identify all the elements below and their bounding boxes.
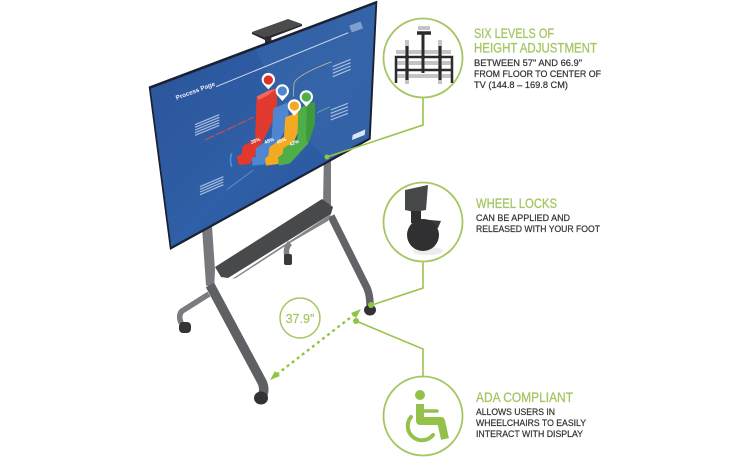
width callout: 37.9" xyxy=(286,312,314,326)
body: wheel: CAN BE APPLIED AND xyxy=(476,213,570,224)
top shelf xyxy=(252,19,302,46)
pin green xyxy=(300,90,313,107)
percent labels: 38% xyxy=(250,137,262,146)
connector dot: ADA xyxy=(353,318,359,324)
body: ADA: INTERACT WITH DISPLAY xyxy=(476,429,584,440)
dashed width arrow xyxy=(270,309,361,380)
red stair xyxy=(237,88,277,165)
body: ADA: WHEELCHAIRS TO EASILY xyxy=(476,418,587,429)
heading: wheel: WHEEL LOCKS xyxy=(476,196,557,211)
text block left upper xyxy=(195,115,219,135)
green stair xyxy=(278,102,315,166)
connector: height xyxy=(327,98,423,157)
percent labels: 42% xyxy=(289,139,301,148)
body: height: FROM FLOOR TO CENTER OF xyxy=(474,69,601,80)
mount frame xyxy=(396,33,452,83)
body: height: TV (144.8 – 169.8 CM) xyxy=(474,80,568,91)
icon: wheelchair xyxy=(408,390,445,440)
percent labels xyxy=(250,137,301,148)
body: wheel: RELEASED WITH YOUR FOOT xyxy=(476,224,600,235)
heading: height: SIX LEVELS OF xyxy=(474,26,554,41)
orange stair xyxy=(265,112,299,166)
tray xyxy=(215,199,333,279)
screen glare xyxy=(255,4,375,160)
connector dot: height xyxy=(324,154,330,160)
cart stand xyxy=(179,150,376,404)
connector: wheel xyxy=(372,262,423,305)
heading: height: HEIGHT ADJUSTMENT xyxy=(474,40,597,56)
back caster xyxy=(284,243,292,265)
pin orange xyxy=(288,99,301,116)
pin blue xyxy=(276,84,289,101)
connector: ADA xyxy=(356,321,423,376)
left post xyxy=(202,226,215,290)
text block right upper xyxy=(333,59,351,77)
width callout xyxy=(280,298,320,338)
ghost positions xyxy=(396,28,451,84)
right post xyxy=(323,150,331,205)
heading rule xyxy=(216,33,348,87)
circle: wheel lock xyxy=(384,182,462,262)
body: ADA: ALLOWS USERS IN xyxy=(476,407,555,418)
screen heading: Process Page xyxy=(175,81,217,102)
text block right lower xyxy=(331,103,348,120)
blue stair xyxy=(252,103,289,166)
percent labels: 45% xyxy=(276,137,288,146)
TV xyxy=(149,1,377,250)
logo xyxy=(352,129,365,140)
front left leg xyxy=(210,285,268,404)
body: height: BETWEEN 57" AND 66.9" xyxy=(474,58,582,69)
connector dot: wheel xyxy=(368,302,374,308)
percent labels: 48% xyxy=(264,137,276,146)
back left leg xyxy=(179,294,209,333)
circle: height adjustment mount xyxy=(384,18,462,98)
circle: ADA xyxy=(384,376,462,456)
right leg xyxy=(331,216,376,316)
screen xyxy=(151,4,375,247)
TV frame xyxy=(149,1,377,250)
text block left lower xyxy=(200,177,223,195)
pin red xyxy=(262,73,275,89)
heading: ADA: ADA COMPLIANT xyxy=(476,390,573,405)
red label xyxy=(205,117,253,140)
